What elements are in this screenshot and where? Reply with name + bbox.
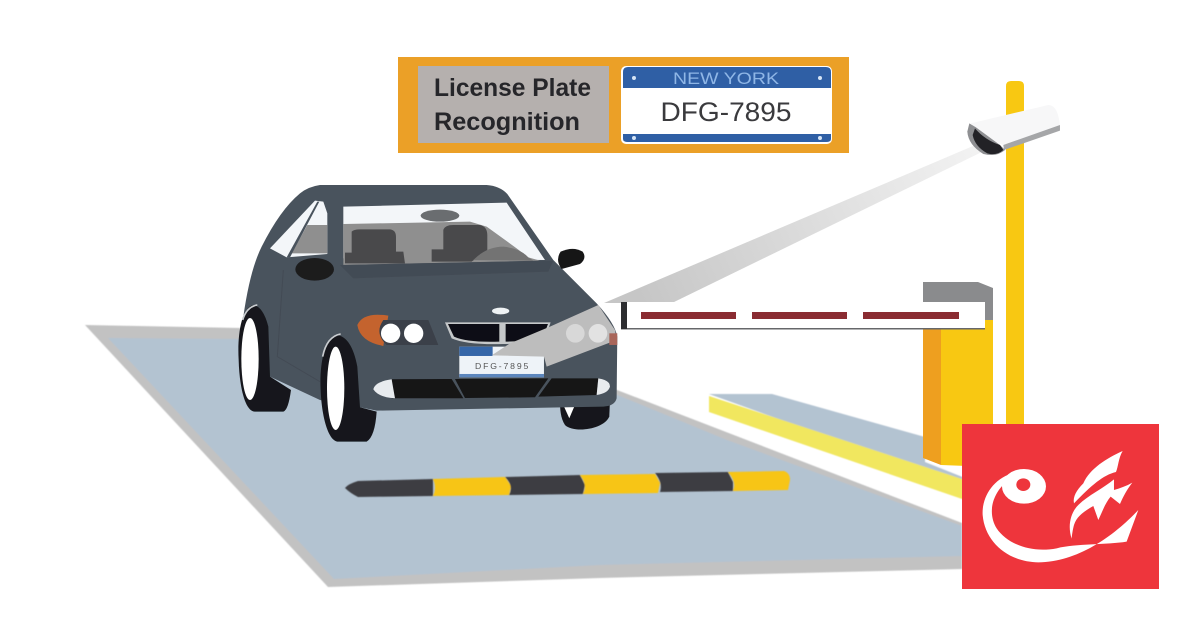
cabinet orange side xyxy=(923,326,941,465)
fog lights xyxy=(373,379,395,398)
amber indicator xyxy=(357,315,388,346)
beam on car xyxy=(492,305,617,367)
window pillar xyxy=(287,202,319,257)
camera body xyxy=(971,105,1060,145)
speed bump xyxy=(345,471,790,497)
dashboard band xyxy=(340,261,553,278)
caption box: License Plate xyxy=(434,74,591,102)
small licence plate xyxy=(459,347,544,377)
ground: parking lane xyxy=(85,325,962,587)
red logo badge xyxy=(962,424,1159,589)
New York plate: NEW YORK xyxy=(673,69,780,88)
camera xyxy=(967,105,1060,155)
camera pole xyxy=(1006,81,1024,430)
car xyxy=(238,185,617,442)
wheel arch highlights xyxy=(243,305,341,357)
car body xyxy=(243,185,617,411)
barrier arm xyxy=(621,302,985,330)
front left wheel xyxy=(320,335,377,442)
lower bumper grille xyxy=(392,378,598,398)
cabinet yellow front xyxy=(941,320,993,467)
swoosh xyxy=(983,473,1138,562)
eye xyxy=(1002,469,1046,504)
body shading lines xyxy=(277,270,320,382)
banner: license plate recognition xyxy=(398,57,849,153)
rear right wheel xyxy=(560,400,610,430)
right headlight xyxy=(566,324,585,343)
rear view mirror xyxy=(421,210,459,222)
caption box: Recognition xyxy=(434,108,580,136)
New York plate: DFG-7895 xyxy=(660,97,792,127)
right amber edge xyxy=(609,333,617,345)
camera lens halo xyxy=(967,123,1005,155)
seats xyxy=(345,229,405,263)
small licence plate: DFG-7895 xyxy=(475,361,528,371)
camera lens xyxy=(973,128,1003,154)
left side mirror xyxy=(295,258,334,281)
barrier gate cabinet xyxy=(923,282,993,467)
windshield xyxy=(343,203,545,260)
right side mirror xyxy=(558,249,584,269)
eye pupil xyxy=(1016,478,1030,491)
side window xyxy=(270,201,327,257)
lower flame xyxy=(1070,479,1132,539)
cabinet grey top xyxy=(923,282,993,322)
car interior xyxy=(343,222,540,265)
kidney grille xyxy=(445,322,551,344)
rear left wheel xyxy=(238,305,291,412)
red stripes xyxy=(641,312,959,319)
caption box xyxy=(418,66,609,143)
upper flame xyxy=(1074,451,1123,503)
barrier base island xyxy=(709,394,965,500)
banner orange frame xyxy=(398,57,849,153)
hood badge xyxy=(492,308,509,314)
New York plate xyxy=(621,66,832,144)
camera light beam xyxy=(604,146,986,303)
logo mark xyxy=(983,451,1138,562)
left headlight xyxy=(379,320,438,345)
passenger headrest xyxy=(473,247,533,261)
